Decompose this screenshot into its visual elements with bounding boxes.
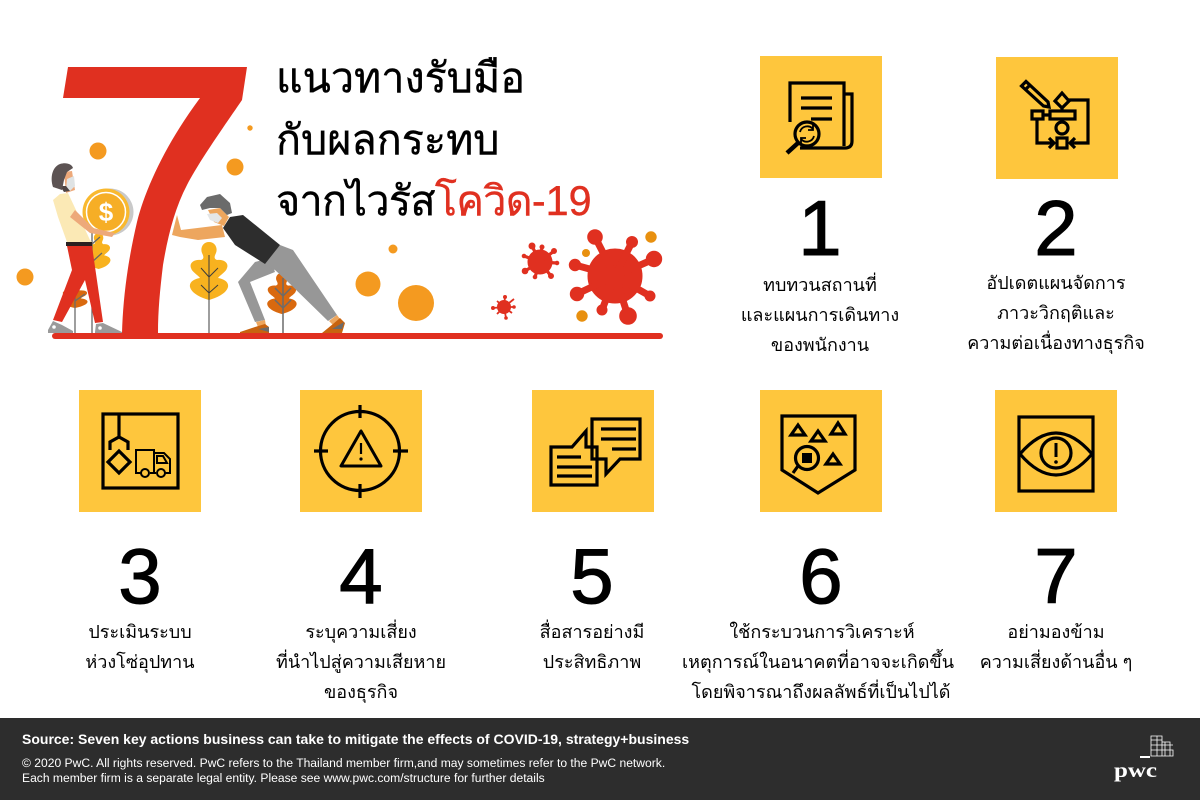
label [85,622,195,673]
PwC logo: pwc [1114,758,1157,782]
belt [66,242,92,246]
number 4: 4 [339,532,383,620]
label: ใช้กระบวนการวิเคราะห์ [729,622,915,642]
shirt [53,193,92,242]
label: ความต่อเนื่องทางธุรกิจ [967,333,1145,353]
face [64,171,75,193]
label [741,272,899,355]
number 6: 6 [799,532,843,620]
label [276,620,446,703]
arm and hand [172,215,225,240]
copyright text [22,756,665,785]
label [980,622,1132,672]
icon: warning in crosshair [300,390,422,512]
number 1: 1 [798,184,842,272]
step 1 [741,56,899,355]
far leg [238,258,275,322]
label: ห่วงโซ่อุปทาน [85,652,195,672]
step 4 [276,390,446,703]
icon: plan flowchart with pencil [996,57,1118,179]
step 6 [682,390,954,702]
step 3 [79,390,201,673]
label: ของธุรกิจ [324,682,398,702]
tree: right orange leaf [267,273,297,333]
hair [52,163,73,190]
step 5 [532,390,654,672]
number 3: 3 [118,532,162,620]
title: กับผลกระทบ [276,116,500,162]
label: ระบุความเสี่ยง [305,622,417,642]
icon: scenario analysis shield [760,390,882,512]
label: ที่นำไปสู่ความเสียหาย [276,652,446,672]
big red number seven [63,67,247,333]
coin [86,188,134,236]
label: สื่อสารอย่างมี [540,622,644,642]
mask [207,213,222,223]
person carrying coin [48,163,134,333]
shoes [240,318,345,333]
mask [66,176,75,191]
virus accent dots [576,231,657,322]
icon: eye with warning [995,390,1117,512]
label: ภาวะวิกฤติและ [997,303,1115,323]
tree: left small orange leaf [62,282,88,333]
source line: Source: Seven key actions business can take to mitigate the effects of COVID-19, strategy+business [22,731,689,747]
label: ความเสี่ยงด้านอื่น ๆ [980,652,1132,672]
near leg [262,245,337,321]
number 5: 5 [570,532,614,620]
label: เหตุการณ์ในอนาคตที่อาจจะเกิดขึ้น [682,652,954,672]
copyright text: © 2020 PwC. All rights reserved. PwC refers to the Thailand member firm,and may sometimes refer to the PwC network. [22,756,665,770]
person pushing the seven [172,194,345,333]
ankles [256,315,340,327]
label: ของพนักงาน [771,335,869,355]
label: ทบทวนสถานที่ [763,275,877,295]
label: อย่ามองข้าม [1007,622,1105,642]
label: และแผนการเดินทาง [741,305,899,325]
arm [70,210,115,237]
label: ประเมินระบบ [88,622,192,642]
label: โดยพิจารณาถึงผลลัพธ์ที่เป็นไปได้ [691,682,950,702]
title: จากไวรัสโควิด-19 [276,178,592,224]
virus large [569,230,662,324]
person carrying coin: $ [99,197,114,227]
step 7 [980,390,1132,672]
title: แนวทางรับมือ [276,55,525,101]
virus medium [522,243,559,279]
icon: document with magnifier [760,56,882,178]
step 2 [967,57,1145,354]
copyright text: Each member firm is a separate legal entity. Please see www.pwc.com/structure for further details [22,771,545,785]
orange dots [16,125,434,321]
label: ประสิทธิภาพ [543,652,641,672]
number 7: 7 [1034,532,1078,620]
beard [60,186,70,192]
ground line [52,333,663,339]
label [967,273,1145,354]
label: อัปเดตแผนจัดการ [986,273,1126,293]
label [682,622,954,702]
number 2: 2 [1034,184,1078,272]
label [540,620,644,672]
shirt [223,215,280,264]
tree: left yellow leaf [87,228,110,333]
footer bar [0,718,1200,800]
trousers [53,246,103,323]
shoes [48,321,122,333]
PwC logo [1114,736,1174,782]
hair [200,194,232,215]
icon: supply chain box with truck [79,390,201,512]
icon: speech bubbles [532,390,654,512]
face [208,208,229,226]
title [276,55,592,224]
illustration: giant seven with people pushing, trees and viruses [16,67,663,339]
tree: centre yellow leaf [190,242,228,333]
virus small [492,296,515,319]
